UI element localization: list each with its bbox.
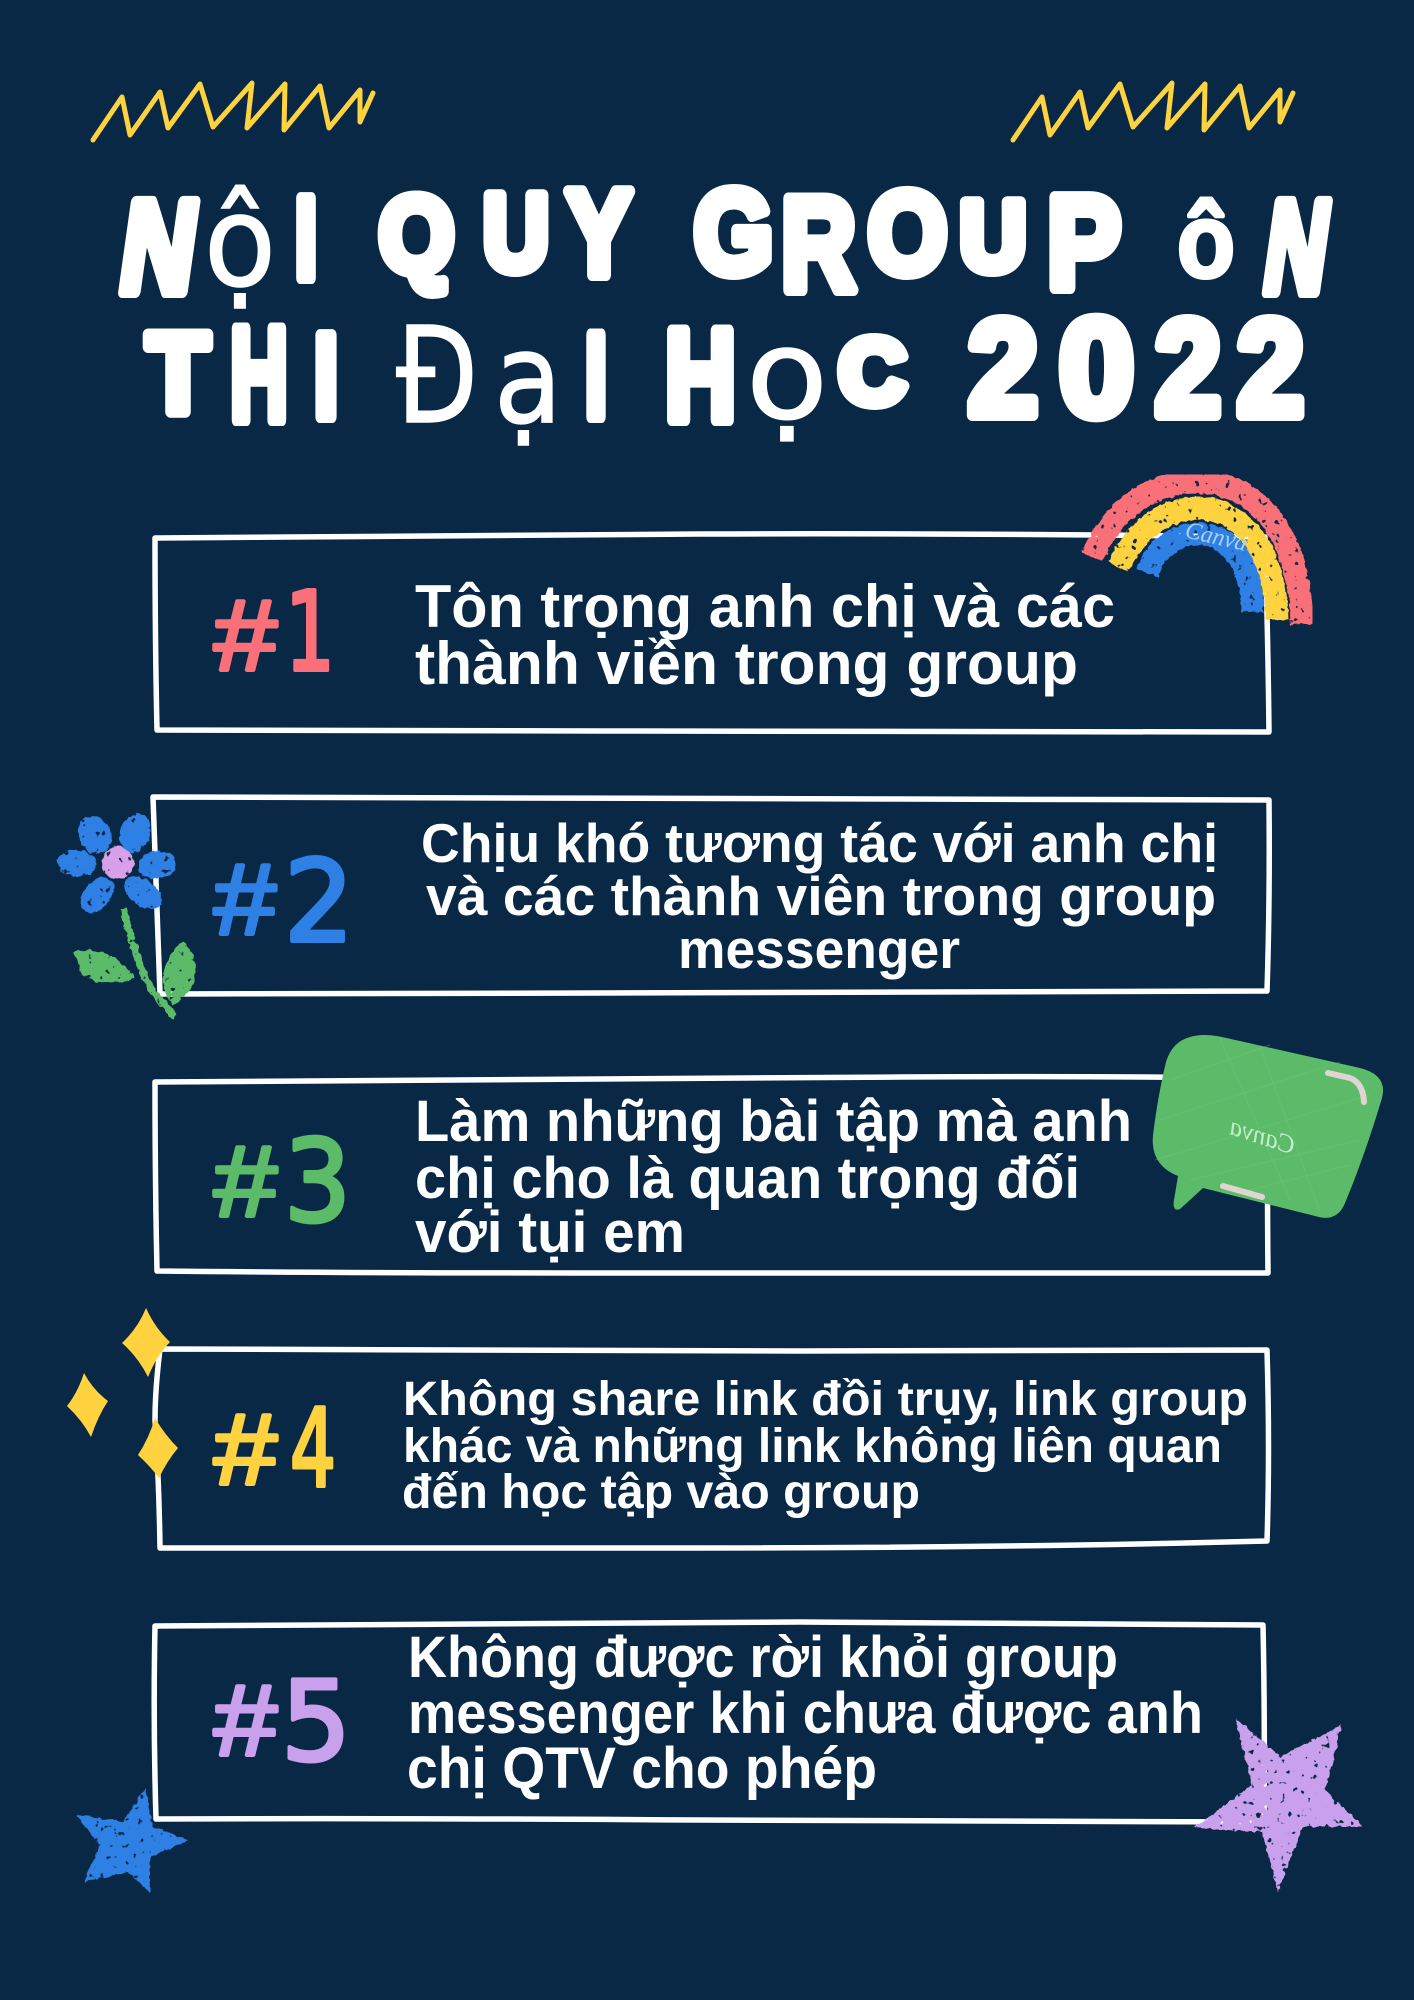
title: 2: [968, 292, 1038, 444]
rule 1 text: Tôn trọng anh chị và các: [415, 573, 1115, 640]
title: Q: [379, 174, 454, 295]
rule 4 text: khác và những link không liên quan: [403, 1420, 1222, 1473]
number 4: #: [214, 1394, 277, 1506]
rule 5 text: Không được rời khỏi group: [408, 1625, 1118, 1690]
rule 2 text: Chịu khó tương tác với anh chị: [421, 812, 1218, 874]
number 4: 4: [290, 1387, 336, 1512]
title: 2: [1155, 292, 1221, 444]
title: U: [960, 181, 1026, 291]
title: ô: [1177, 183, 1235, 300]
title: G: [694, 166, 773, 299]
panel: rule 4: [155, 1349, 1268, 1548]
icon: sparkles: [67, 1308, 178, 1478]
title: N: [1256, 174, 1339, 320]
title: O: [868, 168, 947, 298]
icon: yellow scribble left: [93, 83, 373, 140]
title: ạ: [494, 307, 562, 452]
icon: purple star: [1193, 1718, 1363, 1892]
rule 4 text: đến học tập vào group: [402, 1466, 920, 1519]
rule 2 text: messenger: [678, 918, 960, 980]
number 5: [214, 1658, 351, 1787]
number 2: [214, 836, 354, 968]
rule 5 text: chị QTV cho phép: [407, 1736, 877, 1801]
panel: rule 1: [155, 534, 1269, 732]
title: T: [147, 311, 209, 436]
number 1: 1: [285, 568, 335, 696]
rule 3 text: với tụi em: [415, 1200, 685, 1265]
panel: rule 2: [153, 797, 1269, 994]
number 1: #: [214, 580, 277, 692]
number 1: [214, 568, 335, 696]
number 4: [214, 1387, 336, 1512]
title: C: [839, 321, 906, 423]
icon: rainbow: [1092, 482, 1302, 624]
title: Y: [566, 165, 632, 301]
title: ọ: [746, 303, 828, 448]
title: ộ: [204, 170, 276, 315]
number 5: #: [214, 1665, 277, 1777]
title: H: [665, 302, 736, 448]
number 2: #: [214, 844, 276, 956]
icon: flower: [56, 809, 196, 1017]
title: I: [585, 309, 607, 443]
title: U: [483, 172, 549, 294]
title: I: [295, 173, 317, 303]
rule 1 text: thành viền trong group: [415, 630, 1078, 697]
title: N: [112, 174, 207, 320]
rule 5 text: [407, 1625, 1203, 1801]
rule 3 text: Làm những bài tập mà anh: [415, 1089, 1132, 1154]
rule 1 text: [415, 573, 1115, 697]
rule 5 text: messenger khi chưa được anh: [408, 1681, 1203, 1746]
number 3: 3: [284, 1116, 351, 1248]
panel: rule 3: [155, 1077, 1268, 1273]
number 5: 5: [281, 1658, 351, 1787]
rule 4 text: Không share link đồi trụy, link group: [403, 1373, 1248, 1426]
title: 2: [1237, 292, 1304, 444]
panel: rule 5: [154, 1622, 1264, 1822]
rule 3 text: [415, 1089, 1132, 1265]
rainbow watermark: Canva: [1183, 518, 1250, 557]
title: R: [781, 171, 856, 319]
rule 2 text: [421, 812, 1218, 980]
number 3: [214, 1116, 351, 1248]
title: I: [314, 310, 338, 443]
title: P: [1047, 169, 1121, 316]
icon: speech bubble: [1153, 1035, 1383, 1218]
title: H: [230, 301, 288, 449]
title: [112, 165, 1339, 454]
title: 0: [1059, 291, 1134, 445]
icon: yellow scribble right: [1013, 83, 1293, 140]
number 2: 2: [284, 836, 354, 968]
icon: blue star: [76, 1788, 188, 1893]
bubble watermark: Canva: [1226, 1112, 1299, 1160]
title: Đ: [396, 300, 478, 454]
rule 4 text: [402, 1373, 1248, 1519]
rule 2 text: và các thành viên trong group: [426, 865, 1216, 927]
number 3: #: [214, 1126, 277, 1238]
rule 3 text: chị cho là quan trọng đối: [415, 1146, 1080, 1211]
